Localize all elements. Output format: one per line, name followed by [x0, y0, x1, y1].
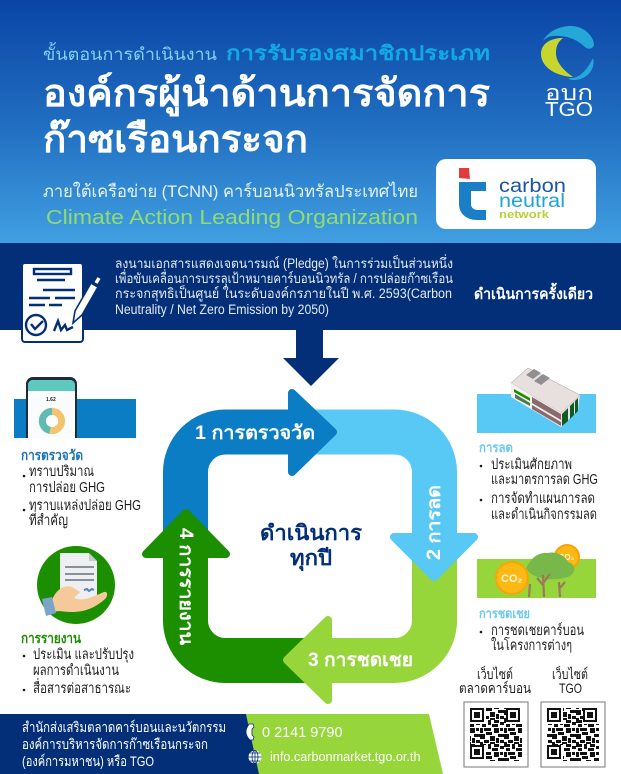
- qr block: TGO: TGO: [559, 680, 582, 696]
- bullet list: [23, 647, 134, 697]
- network subtitle: ภายใต้เครือข่าย (TCNN) คาร์บอนนิวทรัลประเทศไทย: [43, 181, 418, 201]
- bullet list: [480, 457, 598, 523]
- heading: การรายงาน: [21, 630, 81, 646]
- segment: dark green band: [186, 550, 325, 660]
- title: องค์กรผู้นำด้านการจัดการ: [43, 72, 491, 117]
- segment: light green band: [320, 540, 435, 660]
- bullet list: [23, 464, 141, 529]
- english program name: Climate Action Leading Organization: [46, 207, 418, 229]
- center text: [260, 522, 363, 572]
- contact band green: [246, 714, 443, 774]
- icon: signed document: [22, 263, 99, 342]
- organisation text: สำนักส่งเสริมตลาดคาร์บอนและนวัตกรรม: [22, 719, 226, 735]
- pledge text: เพื่อขับเคลื่อนการบรรลุเป้าหมายคาร์บอนนิวทรัล / การปล่อยก๊าซเรือน: [115, 269, 453, 287]
- bullet list: ประเมินศักยภาพ: [491, 457, 572, 473]
- icon: trees and CO2 coins: [477, 545, 596, 598]
- center text: ทุกปี: [290, 546, 332, 572]
- icon: factory: [477, 368, 596, 433]
- segment: blue band: [186, 432, 295, 540]
- logo card: carbon neutral network: carbon: [499, 176, 566, 197]
- panel: pledge band: [0, 243, 621, 330]
- organisation text: องค์การบริหารจัดการก๊าซเรือนกระจก: [22, 736, 208, 752]
- qr block: TGO: เว็บไซต์: [552, 665, 588, 682]
- header panel: [0, 0, 621, 243]
- qr block: TGO: [541, 665, 605, 767]
- logo: TGO: [541, 26, 594, 121]
- segment: light blue band: [285, 432, 434, 545]
- panel: offset: [477, 545, 596, 654]
- once-only label: ดำเนินการครั้งเดียว: [474, 282, 593, 303]
- arrow 2 head: [394, 537, 474, 577]
- subtitle line: process steps: ขั้นตอนการดำเนินงาน: [43, 42, 217, 64]
- pledge text: Neutrality / Net Zero Emission by 2050): [115, 302, 329, 317]
- center text: ดำเนินการ: [260, 522, 363, 545]
- icon: phone on blue band: [14, 377, 136, 438]
- icon: phone: [246, 724, 254, 740]
- label 4: 4 การรายงาน: [175, 528, 196, 645]
- panel: measurement: [14, 377, 141, 529]
- label 2: 2 การลด: [424, 485, 445, 560]
- label 1: 1 การตรวจวัด: [195, 423, 315, 444]
- title: [43, 72, 491, 161]
- bullet list: ทราบแหล่งปล่อย GHG: [29, 498, 141, 514]
- pledge text: กระจกสุทธิเป็นศูนย์ ในระดับองค์กรภายในปี พ.ศ. 2593(Carbon: [115, 284, 452, 302]
- bullet list: สื่อสารต่อสาธารณะ: [33, 678, 131, 697]
- bullet list: [480, 622, 584, 654]
- qr block: carbon market: [459, 665, 531, 767]
- organisation text: [22, 719, 226, 769]
- subtitle line: process steps: การรับรองสมาชิกประเภท: [226, 43, 490, 65]
- phone number: 0 2141 9790: [262, 724, 342, 741]
- arrow 4 head: [146, 513, 226, 554]
- bullet list: ในโครงการต่างๆ: [491, 636, 572, 654]
- cycle diagram: [146, 393, 474, 700]
- title: ก๊าซเรือนกระจก: [43, 119, 308, 161]
- logo card: carbon neutral network: [436, 159, 596, 229]
- qr block: carbon market: เว็บไซต์: [477, 665, 513, 682]
- logo: TGO: อบก: [545, 82, 593, 105]
- subtitle line: process steps: [43, 42, 490, 65]
- icon: hand holding report: [37, 546, 115, 624]
- contact band navy: [0, 714, 259, 774]
- panel: reduction: [477, 368, 598, 523]
- heading: การชดเชย: [479, 606, 530, 621]
- heading: การตรวจวัด: [21, 447, 83, 463]
- qr block: carbon market: ตลาดคาร์บอน: [459, 680, 531, 696]
- icon: trees and CO2 coins: CO₂: [501, 573, 522, 585]
- bullet list: การจัดทำแผนการลด: [491, 491, 595, 507]
- icon: globe: [248, 750, 262, 764]
- bullet list: ที่สำคัญ: [29, 510, 68, 529]
- arrow 1 head: [292, 393, 333, 472]
- website url: info.carbonmarket.tgo.or.th: [270, 749, 420, 764]
- logo: TGO: TGO: [545, 99, 593, 121]
- pledge text: [115, 254, 453, 317]
- arrow: pledge to cycle: [283, 330, 339, 386]
- bullet list: การปล่อย GHG: [29, 480, 105, 496]
- panel: reporting: [21, 546, 134, 697]
- label 3: 3 การชดเชย: [308, 650, 413, 671]
- icon: phone on blue band: 1.62: [46, 397, 56, 403]
- logo card: carbon neutral network: network: [499, 209, 550, 221]
- panel: footer contact: [0, 714, 443, 774]
- logo card: carbon neutral network: neutral: [499, 191, 565, 212]
- heading: การลด: [479, 440, 513, 455]
- icon: trees and CO2 coins: CO₂: [558, 552, 575, 562]
- bullet list: ประเมิน และปรับปรุง: [33, 647, 134, 663]
- bullet list: ผลการดำเนินงาน: [33, 663, 119, 679]
- arrow 3 head: [287, 620, 328, 700]
- bullet list: การชดเชยคาร์บอน: [491, 622, 584, 639]
- bullet list: ทราบปริมาณ: [29, 464, 94, 480]
- pledge text: ลงนามเอกสารแสดงเจตนารมณ์ (Pledge) ในการร่วมเป็นส่วนหนึ่ง: [115, 254, 453, 271]
- organisation text: (องค์การมหาชน) หรือ TGO: [22, 753, 154, 769]
